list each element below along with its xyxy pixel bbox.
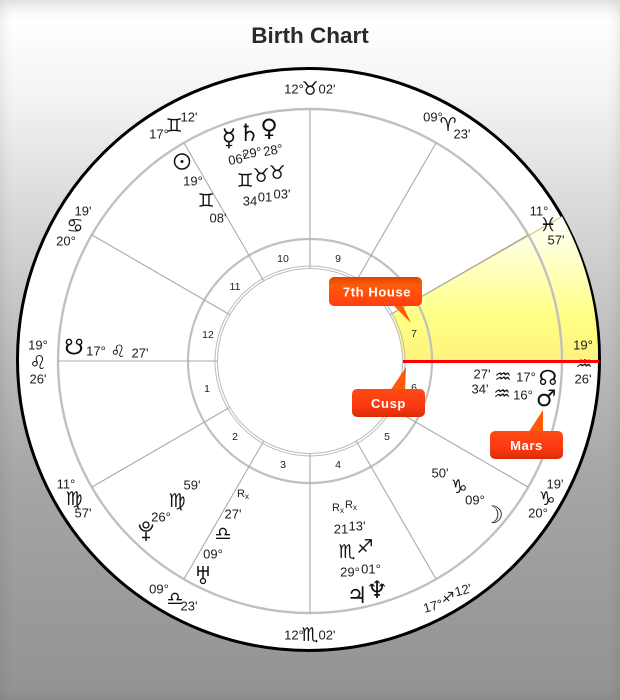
outer cusp labels: ♏ <box>301 624 319 646</box>
planets: Jupiter, Neptune: 21 <box>334 522 348 536</box>
outer cusp labels: 26' <box>30 372 46 386</box>
planets: North Node, Mars: 16° <box>513 388 533 402</box>
planets: Jupiter, Neptune <box>332 499 388 609</box>
cusp line <box>403 360 599 363</box>
planet: Uranus: 27' <box>225 506 241 522</box>
chart disc <box>18 68 600 650</box>
planet: Moon: 09° <box>465 492 485 508</box>
planets: Jupiter, Neptune: R <box>345 499 353 511</box>
planet: Sun: ♊ <box>197 190 215 212</box>
outer cusp labels: ♐ <box>442 590 454 606</box>
house numbers: 12 <box>202 329 214 341</box>
house numbers: 5 <box>384 431 390 443</box>
outer cusp labels: ♋ <box>66 215 84 237</box>
callout: Cusp: Cusp <box>371 396 406 411</box>
callout: Mars: Mars <box>510 438 543 453</box>
outer cusp labels: 57' <box>75 506 91 520</box>
outer cusp labels: 19° <box>28 338 48 352</box>
planets: Jupiter, Neptune: ♆ <box>366 576 388 604</box>
outer cusp labels: 23' <box>454 126 470 142</box>
outer cusp labels: 17° <box>149 126 169 142</box>
outer cusp labels: 02' <box>319 82 335 96</box>
outer cusp labels: 23' <box>181 598 197 614</box>
planets: Mercury, Saturn, Venus: ♀ <box>260 114 278 142</box>
planet: Sun: 08' <box>210 210 226 226</box>
outer cusp labels: 12° <box>284 628 304 642</box>
outer cusp labels: 20° <box>56 234 76 248</box>
planets: Mercury, Saturn, Venus: ♉ <box>268 162 286 184</box>
outer cusp labels: 12° <box>284 82 304 96</box>
planets: North Node, Mars <box>472 366 557 412</box>
outer cusp labels: 12' <box>181 110 197 124</box>
callout: 7th House: 7th House <box>343 284 411 300</box>
planet: Moon: ♑ <box>450 476 468 498</box>
planets: Jupiter, Neptune: R <box>332 502 340 514</box>
planet: Uranus <box>198 488 249 584</box>
outer cusp labels: ♍ <box>65 488 83 510</box>
outer cusp labels: ♒ <box>575 353 593 375</box>
house numbers: 11 <box>230 281 241 293</box>
planets: North Node, Mars: ♂ <box>536 386 556 412</box>
planet: Sun: 19° <box>183 174 203 188</box>
outer cusp labels: 09° <box>423 110 443 124</box>
planets: North Node, Mars: ♒ <box>494 366 512 388</box>
planets: North Node, Mars: ☊ <box>539 366 557 390</box>
planet: Moon <box>432 466 504 529</box>
outer cusp labels <box>28 78 593 646</box>
planets: Mercury, Saturn, Venus <box>222 114 290 208</box>
planet: South Node: 27' <box>132 346 148 360</box>
outer cusp labels: ♊ <box>165 115 183 137</box>
planet: Uranus: 09° <box>203 546 223 562</box>
planets: Mercury, Saturn, Venus: ☿ <box>222 124 236 152</box>
outer cusp labels: 19' <box>547 476 563 492</box>
planets: Mercury, Saturn, Venus: 03' <box>274 186 290 202</box>
outer cusp labels: ♈ <box>439 114 457 136</box>
planet: South Node: ♌ <box>110 342 126 362</box>
outer cusp labels: ♎ <box>166 588 184 610</box>
planets: North Node, Mars: 27' <box>474 366 490 382</box>
callout: 7th House <box>329 277 422 323</box>
outer cusp labels: 11° <box>530 204 548 218</box>
planets: Jupiter, Neptune: 01° <box>361 562 381 576</box>
planets: North Node, Mars: 34' <box>472 382 488 396</box>
callout: Mars <box>490 410 563 459</box>
highlighted 7th house wedge <box>390 216 598 361</box>
planets: Mercury, Saturn, Venus: 06° <box>227 150 249 168</box>
outer cusp labels: 20° <box>528 506 548 520</box>
planet: Uranus: R <box>237 488 245 500</box>
planets: Jupiter, Neptune: ♃ <box>347 583 367 609</box>
planets: Mercury, Saturn, Venus: 01 <box>258 190 272 204</box>
callout: Cusp <box>352 367 425 417</box>
outer cusp labels: 57' <box>548 232 564 248</box>
planets: Jupiter, Neptune: 13' <box>349 518 365 534</box>
house numbers: 3 <box>280 459 286 471</box>
planet: South Node <box>64 336 148 362</box>
planets: Mercury, Saturn, Venus: 28° <box>262 141 284 159</box>
chart rings and house lines <box>58 109 562 613</box>
planets: Mercury, Saturn, Venus: ♊ <box>236 170 254 192</box>
outer cusp labels: 12' <box>453 581 473 599</box>
planet: Pluto: 59' <box>184 478 200 492</box>
outer cusp labels: 11° <box>57 476 75 492</box>
planets: Jupiter, Neptune: ♐ <box>356 536 374 558</box>
house numbers <box>202 253 417 471</box>
planets: Jupiter, Neptune: ♏ <box>338 541 356 563</box>
planet: Pluto: ♍ <box>168 490 186 512</box>
planet: Uranus: x <box>245 492 249 500</box>
planet: Uranus: ♎ <box>214 523 232 545</box>
outer cusp labels: 19' <box>75 204 91 218</box>
outer cusp labels: ♑ <box>538 488 556 510</box>
outer cusp labels: 19° <box>573 338 593 352</box>
planets: North Node, Mars: ♒ <box>493 383 511 405</box>
planet: Sun <box>174 154 226 226</box>
planets: Mercury, Saturn, Venus: 34 <box>243 194 257 208</box>
planets: Mercury, Saturn, Venus: ♉ <box>252 165 270 187</box>
planet: South Node: ☋ <box>64 336 84 360</box>
wedge edge line <box>390 216 562 314</box>
house numbers: 4 <box>335 459 341 471</box>
outer cusp labels: 02' <box>319 628 335 642</box>
house numbers: 7 <box>411 328 417 340</box>
outer cusp labels: 17° <box>422 596 444 616</box>
house numbers: 6 <box>411 382 417 394</box>
outer cusp labels: ♓ <box>539 214 557 236</box>
house numbers: 10 <box>277 253 289 265</box>
title: Birth Chart <box>251 23 369 48</box>
house numbers: 1 <box>204 383 210 395</box>
planets: Mercury, Saturn, Venus: 29° <box>241 144 263 162</box>
planet: Moon: 50' <box>432 466 448 480</box>
outer cusp labels: 26' <box>575 372 591 386</box>
outer cusp labels: ♌ <box>29 352 47 374</box>
outer cusp labels: ♉ <box>301 78 319 100</box>
planets: Jupiter, Neptune: x <box>353 502 357 512</box>
planets: Jupiter, Neptune: x <box>340 506 344 514</box>
planet: Pluto: 26° <box>151 510 171 524</box>
planets: North Node, Mars: 17° <box>516 370 536 384</box>
planet: South Node: 17° <box>86 344 106 358</box>
house numbers: 2 <box>232 431 238 443</box>
planets: Mercury, Saturn, Venus: ♄ <box>238 119 260 147</box>
planet: Moon: ☽ <box>482 501 504 529</box>
house numbers: 9 <box>335 253 341 265</box>
outer cusp labels: 09° <box>149 582 169 596</box>
planets: Jupiter, Neptune: 29° <box>340 564 360 580</box>
planet: Pluto <box>140 478 200 541</box>
